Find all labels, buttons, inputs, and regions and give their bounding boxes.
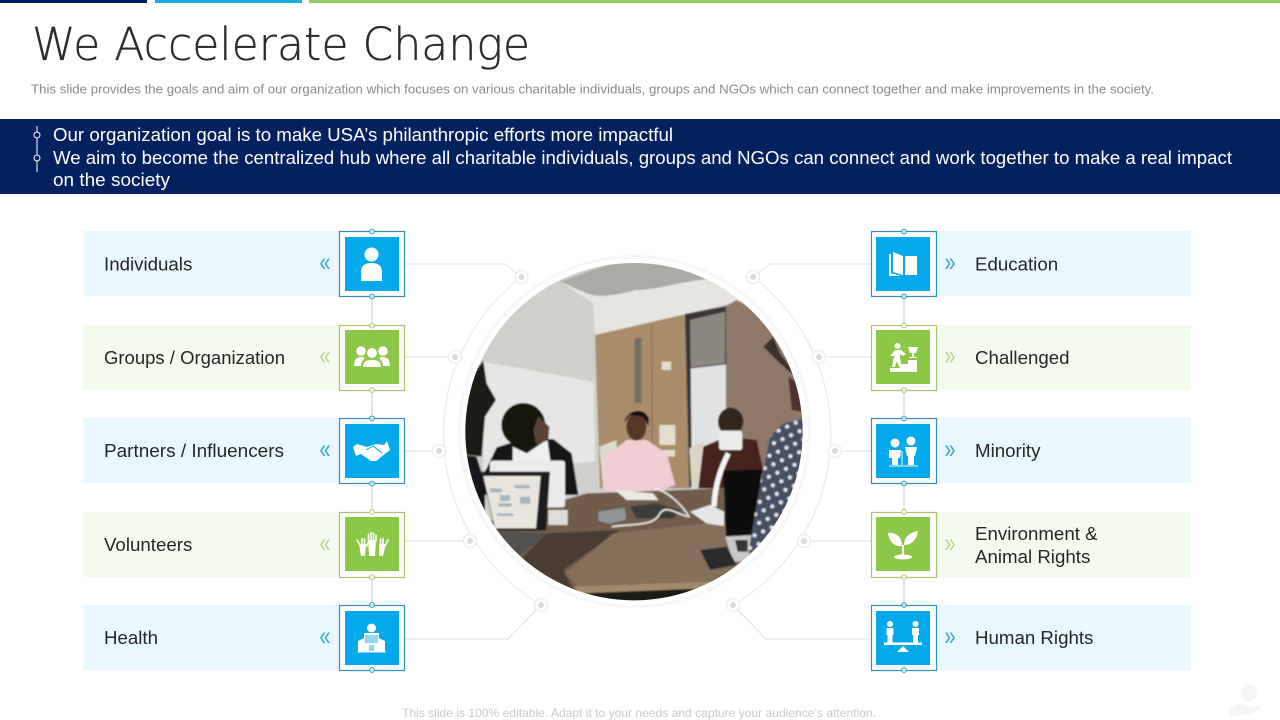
center person (603, 440, 675, 493)
lamp (690, 505, 724, 526)
panel: Environment & Animal Rights (872, 510, 1191, 580)
panel: Partners / Influencers: Partners / Influencers (104, 440, 284, 461)
silver laptop (490, 461, 565, 507)
outer ring and connectors (405, 256, 871, 639)
icon: open book (889, 252, 917, 276)
banner timeline marker (34, 126, 40, 172)
table (491, 487, 758, 590)
panel: Challenged: » (944, 340, 956, 370)
icon: balance scale with people (884, 621, 922, 652)
photo: meeting around a table (465, 263, 803, 600)
panel: Education (872, 229, 1191, 299)
panel: Health (83, 602, 404, 672)
icon: person (361, 248, 382, 281)
panel: Minority (872, 416, 1191, 486)
gadgets and cables (598, 508, 626, 524)
panel: Health: Health (104, 627, 158, 648)
panel: Individuals: « (320, 247, 330, 277)
panel: Volunteers: Volunteers (104, 534, 192, 555)
panel: Volunteers (83, 510, 404, 580)
panel: Individuals (83, 229, 404, 299)
icon: sprout (888, 531, 918, 560)
icon: climbing steps to trophy (890, 343, 918, 372)
banner aim text (53, 148, 1233, 191)
front left laptop (482, 472, 550, 531)
left person (483, 439, 578, 495)
panel: Challenged (872, 323, 1191, 392)
phone (700, 547, 737, 570)
description text: This slide provides the goals and aim of our organization which focuses on various charitable individuals, groups and NGOs which can connect together and make improvements in the society. (31, 82, 1154, 96)
vertical connectors between icons (372, 297, 904, 605)
panel: Health: « (320, 621, 330, 651)
panel: Minority: Minority (975, 440, 1041, 461)
panel: Partners / Influencers (83, 416, 404, 486)
panel: Groups / Organization: « (320, 340, 330, 370)
polka dot person (748, 418, 803, 554)
panel: Minority: » (944, 434, 956, 464)
banner: goals (0, 119, 1280, 194)
panel: Environment & Animal Rights: » (944, 528, 956, 558)
panel: Groups / Organization: Groups / Organization (104, 347, 285, 368)
panel: Environment & Animal Rights: Animal Rights (975, 546, 1090, 567)
left tree (465, 360, 497, 458)
chairs (599, 440, 617, 490)
panel: Education: » (944, 247, 956, 277)
panel: Challenged: Challenged (975, 347, 1070, 368)
icon: raised hands (357, 532, 388, 556)
footer note: This slide is 100% editable. Adapt it to your needs and capture your audience’s attention. (402, 706, 876, 720)
panel: Education: Education (975, 254, 1058, 274)
panel: Volunteers: « (320, 528, 330, 558)
top accent bars (0, 0, 1280, 3)
icon: two elderly people (889, 436, 918, 466)
banner aim text: on the society (53, 170, 171, 191)
panel: Human Rights: » (944, 621, 956, 651)
panel: Environment & Animal Rights: Environment & (975, 523, 1098, 544)
panel: Individuals: Individuals (104, 254, 192, 274)
title: We Accelerate Change (32, 18, 530, 71)
icon: group of people (354, 346, 390, 367)
panel: Human Rights: Human Rights (975, 627, 1093, 648)
right laptop (723, 469, 762, 537)
icon: hospital (358, 624, 386, 652)
banner goal line: Our organization goal is to make USA’s philanthropic efforts more impactful (53, 125, 673, 146)
panel: Human Rights (872, 602, 1191, 672)
right person (698, 437, 763, 488)
panel: Partners / Influencers: « (320, 434, 330, 464)
icon: handshake (353, 441, 390, 461)
watermark logo (1229, 684, 1264, 716)
panel: Groups / Organization (83, 323, 404, 392)
banner aim text: We aim to become the centralized hub where all charitable individuals, groups and NGOs can connect and work together to make a real impact (53, 148, 1233, 169)
